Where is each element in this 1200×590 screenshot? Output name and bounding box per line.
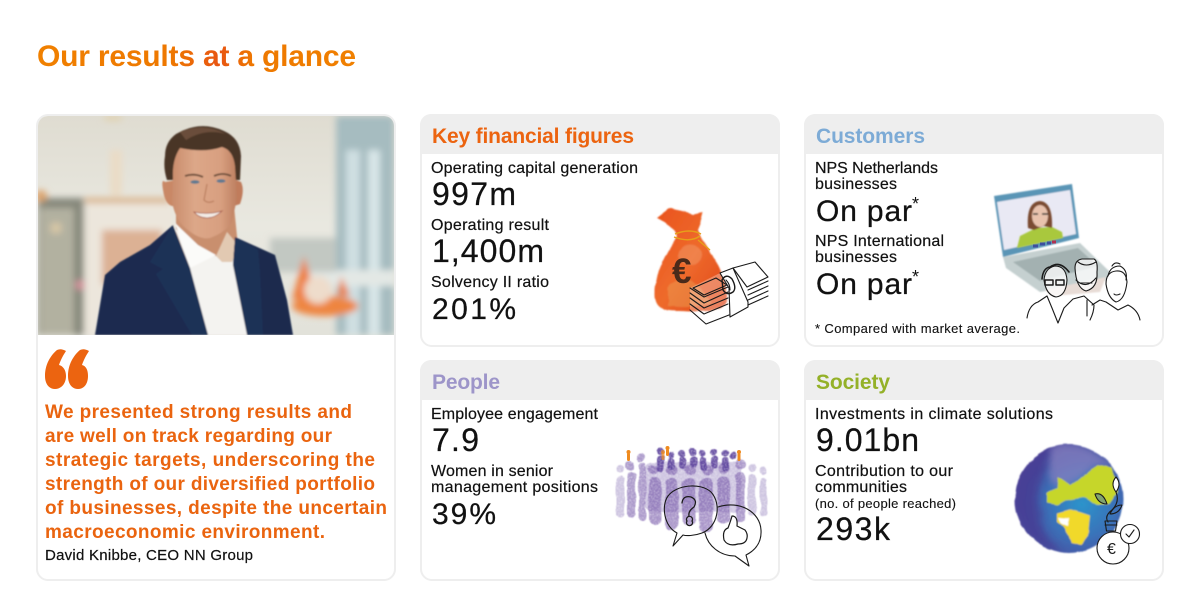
- metric: operating capital generation: [431, 160, 638, 212]
- woman on screen: [1017, 201, 1063, 248]
- footnote: * Compared with market average.: [815, 321, 1020, 336]
- quote text: macroeconomic environment.: [45, 522, 325, 543]
- metric: NPS Netherlands: [815, 160, 938, 228]
- orange figures: [626, 446, 741, 461]
- heading: customers: [804, 114, 1164, 154]
- metric: climate investments: [815, 406, 1053, 458]
- check coin: [1120, 524, 1140, 544]
- metric: women in senior management: Women in senior: [431, 463, 554, 480]
- plant: [1095, 477, 1122, 531]
- metric: employee engagement: 7.9: [432, 422, 479, 458]
- metric: operating capital generation: 997m: [432, 176, 516, 212]
- metric: NPS Netherlands: On par: [816, 195, 912, 228]
- quote text: We presented strong results and: [45, 402, 352, 423]
- panel: CEO quote: [35, 115, 395, 580]
- icon: quotation mark: [45, 349, 89, 389]
- man: [95, 126, 293, 335]
- quote text: strength of our diversified portfolio: [45, 474, 375, 495]
- metric: NPS International: On par: [816, 268, 912, 301]
- metric: climate investments: 9.01bn: [816, 422, 919, 458]
- quote text: [45, 402, 387, 543]
- panel: key financial figures: [420, 114, 780, 346]
- people line drawing: [1027, 259, 1140, 323]
- crowd: [616, 448, 767, 532]
- metric: NPS International: NPS International: [815, 233, 944, 250]
- metric: solvency ratio: Solvency II ratio: [431, 274, 549, 291]
- money bag: [1097, 532, 1129, 564]
- metric: community contribution: Contribution to our: [815, 463, 954, 480]
- CEO photo: [35, 115, 394, 335]
- heading: society: Society: [816, 371, 890, 394]
- metric: women in senior management: 39%: [432, 498, 496, 531]
- heading: people: People: [432, 371, 500, 394]
- metric: operating result: 1,400m: [432, 233, 544, 269]
- metric: NPS Netherlands: NPS Netherlands: [815, 160, 938, 177]
- metric: NPS Netherlands: businesses: [815, 176, 897, 193]
- panel: customers: [804, 114, 1164, 346]
- quote attribution: David Knibbe, CEO NN Group: [45, 547, 253, 564]
- heading: customers: Customers: [816, 125, 925, 148]
- quote text: are well on track regarding our: [45, 426, 333, 447]
- icon: laptop and people: [994, 184, 1140, 323]
- heading: key financial figures: [420, 114, 780, 154]
- metric: solvency ratio: 201%: [432, 293, 516, 326]
- heading: people: [420, 360, 780, 400]
- panel: society: [804, 360, 1164, 580]
- icon: crowd with speech bubbles: [616, 446, 767, 566]
- metric: NPS International: [815, 233, 944, 301]
- metric: community contribution: 293k: [816, 511, 891, 547]
- euro on bag: €: [1107, 541, 1116, 558]
- quote text: strategic targets, underscoring the: [45, 450, 375, 471]
- metric: solvency ratio: [431, 274, 549, 326]
- metric: community contribution: [815, 463, 956, 547]
- question bubble: [664, 486, 717, 546]
- heading: key financial figures: Key financial figures: [432, 125, 634, 148]
- icon: globe with plant and coin: [1014, 445, 1140, 564]
- icon: money bag and banknotes: [655, 208, 768, 324]
- metric: operating result: Operating result: [431, 217, 550, 234]
- metric: employee engagement: Employee engagement: [431, 406, 599, 423]
- metric: NPS International: businesses: [815, 249, 897, 266]
- metric: NPS Netherlands: *: [912, 194, 919, 214]
- quote text: of businesses, despite the uncertain: [45, 498, 387, 519]
- heading: society: [804, 360, 1164, 400]
- panel: people: [420, 360, 780, 580]
- euro sign: €: [672, 252, 691, 291]
- metric: women in senior management: [431, 463, 598, 531]
- metric: operating result: [431, 217, 550, 269]
- metric: employee engagement: [431, 406, 599, 458]
- metric: women in senior management: management positions: [431, 479, 598, 496]
- metric: NPS International: *: [912, 267, 919, 287]
- metric: operating capital generation: Operating capital generation: [431, 160, 638, 177]
- metric: climate investments: Investments in climate solutions: [815, 406, 1053, 423]
- title: Our results at a glance: [37, 40, 356, 73]
- metric: community contribution: (no. of people reached): [815, 496, 956, 511]
- metric: community contribution: communities: [815, 479, 907, 496]
- thumbs-up bubble: [705, 505, 761, 566]
